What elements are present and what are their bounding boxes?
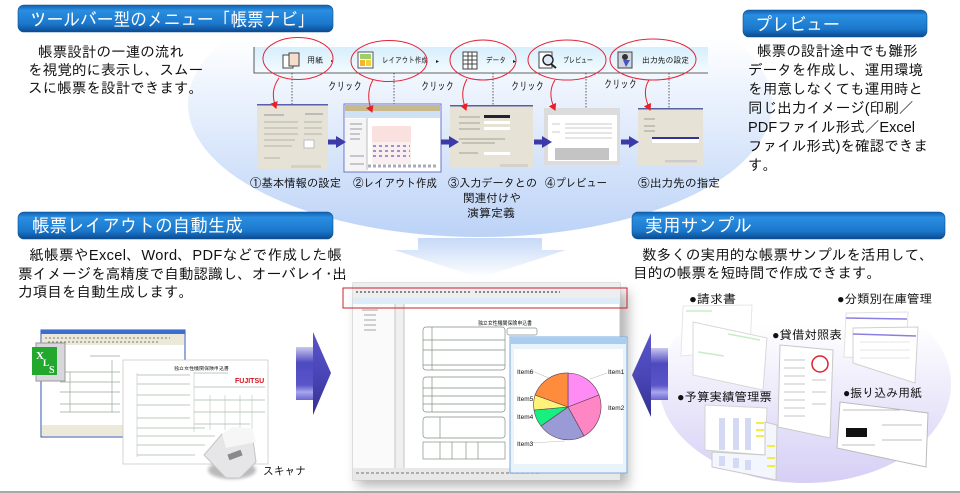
sample documents <box>677 292 932 480</box>
excel window <box>41 330 185 437</box>
icon: XLS file: S <box>49 365 55 376</box>
text block: preview description: を用意しなくても運用時と <box>748 82 923 98</box>
red highlight rectangle <box>343 288 627 308</box>
text block: toolbar description: スに帳票を設計できます。 <box>28 81 203 97</box>
heading: preview <box>743 10 927 37</box>
screen 1: basic info <box>257 104 328 169</box>
toolbar strip: 出力先の設定 <box>642 56 689 65</box>
paper form <box>123 360 268 464</box>
text block: preview description: 同じ出力イメージ(印刷／ <box>748 100 913 117</box>
text block: samples description: 目的の帳票を短時間で作成できます。 <box>633 265 881 282</box>
step labels: ③入力データとの <box>448 177 537 190</box>
icon: layout <box>358 52 373 68</box>
chart dialog window <box>510 337 627 473</box>
text block: preview description: データを作成し、運用環境 <box>748 62 923 79</box>
pie labels: Item5 <box>517 396 534 403</box>
text block: samples description: 数多くの実用的な帳票サンプルを活用して、 <box>642 247 934 264</box>
toolbar strip: 用紙 <box>307 56 323 65</box>
icon: preview magnifier <box>539 52 556 68</box>
screen thumbnails <box>257 104 703 172</box>
balance sheet label: ●貸借対照表 <box>772 328 842 342</box>
click labels: クリック <box>604 79 637 91</box>
toolbar strip: プレビュー <box>563 55 593 65</box>
toolbar strip: レイアウト作成 <box>382 56 428 65</box>
pie labels: Item2 <box>608 405 625 412</box>
bottom rule <box>0 491 960 493</box>
paper form: 独立女性機関保険申込書 <box>174 365 229 372</box>
heading: toolbar menu: ツールバー型のメニュー「帳票ナビ」 <box>30 9 314 30</box>
transfer form doc <box>837 402 928 467</box>
illustration: source documents and scanner <box>32 330 306 479</box>
red click arrows <box>273 78 650 112</box>
pie labels <box>517 369 625 448</box>
heading: practical samples <box>632 212 945 239</box>
flow arrows <box>328 136 639 148</box>
panel: toolbar flow ellipse background <box>188 0 772 237</box>
text block: layout generation description: 力項目を自動生成します。 <box>18 284 193 301</box>
central application screen <box>343 283 628 486</box>
screen 5: output destination <box>638 108 703 165</box>
step labels: ①基本情報の設定 <box>250 177 341 190</box>
step labels: ⑤出力先の指定 <box>638 177 720 190</box>
samples ellipse <box>659 285 951 483</box>
step labels: ②レイアウト作成 <box>353 177 437 190</box>
icon: XLS file: L <box>43 358 49 368</box>
click labels: クリック <box>328 81 362 93</box>
icon: output destination <box>618 52 632 68</box>
click labels: クリック <box>421 81 454 93</box>
screen 2: layout <box>344 104 441 172</box>
pie labels: Item4 <box>517 414 534 421</box>
form title: 独立女性機関保険申込書 <box>478 319 532 327</box>
budget label: ●予算実績管理票 <box>677 390 772 404</box>
text block: layout generation description: 紙帳票やExcel、Word、PDFなどで作成した帳 <box>29 247 342 264</box>
screen 4: preview <box>544 108 620 165</box>
icon: paper <box>283 53 299 68</box>
balance sheet doc <box>778 345 833 438</box>
invoice label: ●請求書 <box>689 292 736 306</box>
icon: data grid <box>463 52 477 69</box>
text block: preview description: ファイル形式)を確認できま <box>748 139 928 155</box>
scanner label: スキャナ <box>263 465 306 478</box>
text block: preview description: 帳票の設計途中でも雛形 <box>757 43 918 60</box>
heading: automatic layout generation <box>18 212 333 239</box>
icon: XLS file <box>32 343 65 381</box>
text block: preview description: す。 <box>748 158 777 174</box>
text block: preview description: PDFファイル形式／Excel <box>748 119 915 136</box>
step labels: 関連付けや <box>463 192 521 205</box>
heading: automatic layout generation: 帳票レイアウトの自動生成 <box>32 215 243 236</box>
toolbar strip <box>254 47 708 108</box>
form in central screen <box>423 327 537 459</box>
toolbar strip: データ <box>486 56 506 65</box>
heading: practical samples: 実用サンプル <box>645 215 752 236</box>
step labels: ④プレビュー <box>545 177 607 190</box>
budget doc <box>705 405 777 480</box>
callouts: red ovals <box>263 38 696 82</box>
step labels: 演算定義 <box>467 207 515 220</box>
heading: preview: プレビュー <box>755 14 840 35</box>
scanner <box>204 427 256 479</box>
text block: toolbar description: を視覚的に表示し、スムー <box>28 62 203 79</box>
arrow: right to central screen <box>296 332 331 415</box>
arrow: large downward arrow <box>394 238 566 278</box>
step labels <box>250 177 720 220</box>
inventory label: ●分類別在庫管理 <box>837 292 932 306</box>
pie chart <box>534 373 601 440</box>
text block: toolbar description: 帳票設計の一連の流れ <box>38 45 184 61</box>
pie labels: Item6 <box>517 369 534 376</box>
click labels <box>328 79 637 93</box>
paper form: FUJITSU <box>235 378 264 385</box>
inventory doc <box>844 312 918 383</box>
transfer form label: ●振り込み用紙 <box>843 386 922 400</box>
icon: XLS file: X <box>36 350 44 362</box>
invoice doc <box>681 305 767 390</box>
click labels: クリック <box>511 81 544 93</box>
screen 3: data link <box>450 105 533 168</box>
pie labels: Item3 <box>517 441 534 448</box>
arrow: left to central screen <box>632 333 668 417</box>
pie labels: Item1 <box>608 369 625 376</box>
text block: layout generation description: 票イメージを高精度で自動認識し、オーバレイ･出 <box>18 266 347 283</box>
